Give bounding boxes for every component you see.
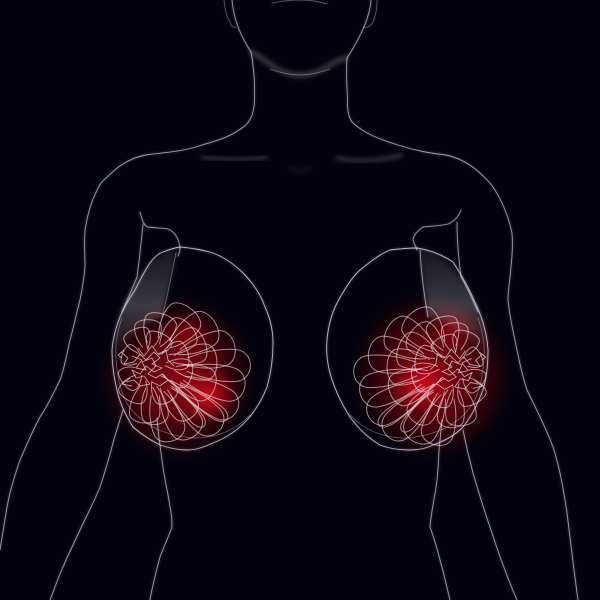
- outline: left waist: [150, 418, 172, 600]
- ears and mouth: [224, 0, 377, 27]
- translucent chest band: [420, 250, 486, 362]
- face and neck soft highlights: [203, 52, 402, 173]
- outline: right inner arm: [463, 430, 517, 600]
- panel: left breast: [112, 212, 273, 450]
- inner fold lines: [350, 318, 484, 438]
- translucent chest band: [114, 250, 178, 362]
- icon: right gland lobes: [351, 299, 491, 452]
- outline: left inner arm: [50, 410, 123, 600]
- inner fold lines: [116, 253, 250, 438]
- armpit fold: [122, 212, 180, 312]
- armpit fold: [413, 210, 478, 317]
- breast contour: [327, 248, 488, 450]
- icon: left gland lobes: [116, 297, 251, 446]
- outline: head and neck right to right arm: [347, 0, 578, 600]
- panel: right breast: [327, 210, 488, 450]
- panel: red glow behind right gland: [350, 290, 514, 462]
- outline: right waist: [430, 420, 450, 600]
- panel: red glow behind left gland: [98, 294, 258, 462]
- breast contour: [112, 247, 273, 450]
- outline: head and neck left to left arm: [0, 0, 255, 550]
